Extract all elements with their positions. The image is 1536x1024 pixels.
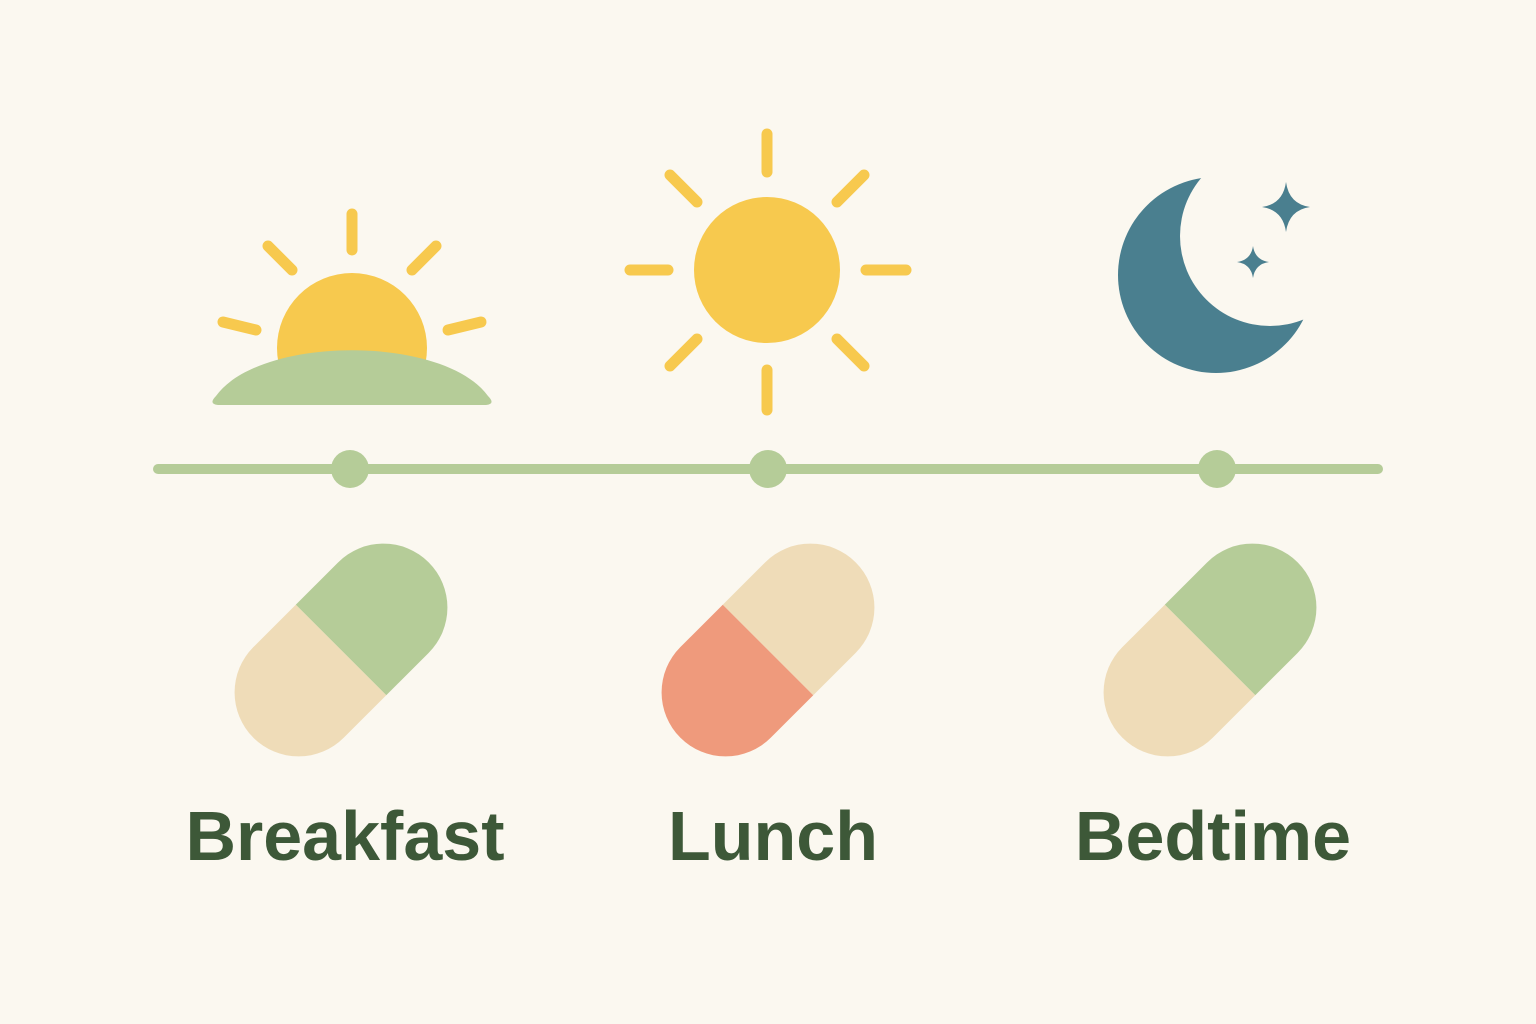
- icon: moon and stars: [1118, 177, 1314, 373]
- icon: midday sun: [630, 134, 906, 410]
- label: Lunch: Lunch: [668, 797, 878, 875]
- icon: sunrise: [212, 214, 492, 423]
- label: Breakfast: Breakfast: [185, 797, 505, 875]
- pill: lunch: [635, 517, 901, 783]
- label: Bedtime: Bedtime: [1075, 797, 1351, 875]
- pill: bedtime: [1077, 517, 1343, 783]
- timeline: [158, 450, 1378, 488]
- pill: breakfast: [208, 517, 474, 783]
